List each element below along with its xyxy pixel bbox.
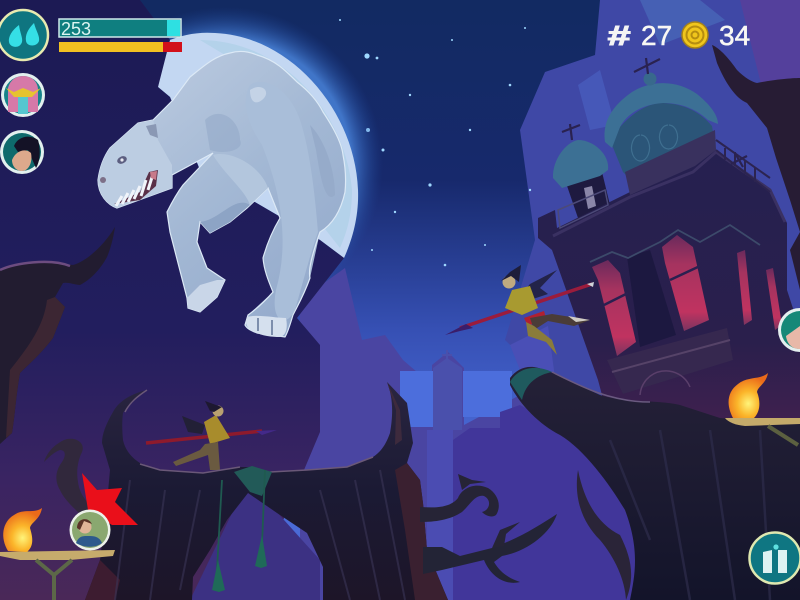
red windows <box>592 260 636 356</box>
tower body <box>538 150 800 425</box>
stars <box>339 19 531 266</box>
portrait: player on platform <box>70 510 110 550</box>
large dome drum <box>612 103 716 190</box>
HUD: quote button <box>0 10 48 60</box>
horned rock top right <box>712 45 800 290</box>
mouth and teeth <box>114 170 158 204</box>
red arrow pointer <box>82 473 138 525</box>
balustrade right <box>716 140 770 192</box>
tassels <box>212 560 225 592</box>
body and arms <box>98 52 346 337</box>
ear <box>146 124 158 138</box>
HUD: action button <box>750 532 800 584</box>
eye <box>116 155 128 165</box>
tower ledge <box>607 328 733 394</box>
small dome lantern <box>565 172 610 218</box>
central arched rock bridge <box>85 382 448 600</box>
spike <box>577 470 631 600</box>
HUD: health bar: 253 <box>61 19 91 39</box>
dark castle silhouette left <box>0 0 344 600</box>
right torch <box>725 373 800 445</box>
HUD: energy bar <box>59 42 182 52</box>
horned rock left <box>0 227 115 444</box>
right rock platform <box>510 367 800 600</box>
nose <box>100 177 106 183</box>
leaping warrior with spear <box>445 265 594 355</box>
claws <box>187 280 225 312</box>
HUD: coin value: 34 <box>719 20 750 51</box>
arch shadow backdrop <box>190 480 320 600</box>
reddish bark <box>395 463 448 600</box>
portrait: pink haired character <box>1 73 45 117</box>
parapet with lattice <box>625 130 716 195</box>
icon: gold coin <box>682 22 708 48</box>
shoulder highlight and shading <box>246 82 318 320</box>
portrait: dark haired character <box>0 130 44 174</box>
vine knot <box>234 466 272 496</box>
tower with domes <box>538 58 800 425</box>
distant castle silhouettes centre <box>300 268 680 600</box>
rear leg <box>245 218 320 337</box>
large dome cross <box>634 58 660 74</box>
curling claw branches right of bridge <box>420 474 557 583</box>
large dome cap <box>604 83 718 148</box>
left claw branch <box>44 439 104 525</box>
white beast <box>98 52 346 337</box>
HUD: score value: 27 <box>641 20 672 51</box>
moon <box>67 7 383 323</box>
left torch <box>0 508 115 600</box>
small dome cap <box>553 140 608 188</box>
head <box>98 120 172 208</box>
portrait: right edge <box>778 308 800 352</box>
running warrior with spear <box>146 401 277 470</box>
HUD: health bar <box>59 19 181 39</box>
small dome cross <box>562 124 580 140</box>
HUD: score icon: # <box>607 20 631 51</box>
